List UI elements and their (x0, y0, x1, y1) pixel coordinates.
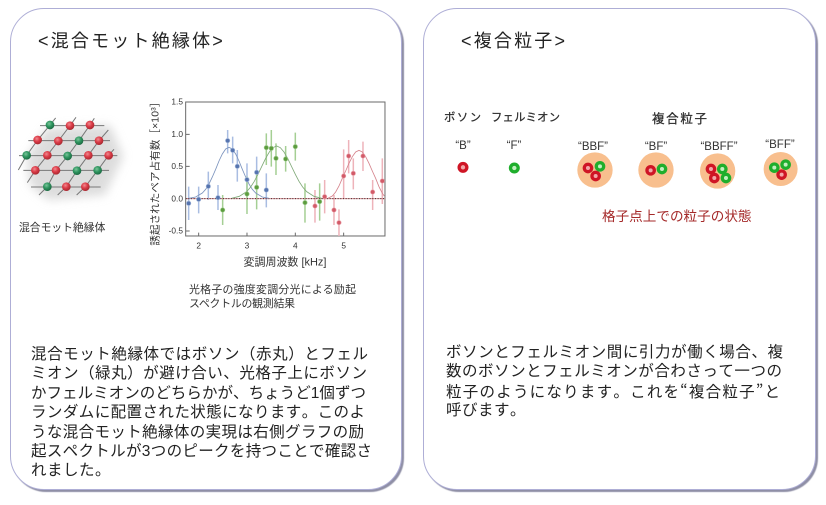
labels: particle names (455, 139, 795, 153)
label: mixed Mott insulator: 混合モット絶縁体 (19, 220, 106, 234)
headings: particle types: 複合粒子 (652, 111, 707, 126)
headings: particle types: フェルミオン (491, 111, 560, 124)
caption: spectrum observation: 光格子の強度変調分光による励起 (189, 282, 356, 296)
text block: mixed Mott insulator description: ランダムに配置された状態になります。このよ (31, 404, 365, 421)
labels: particle names: “BBFF” (700, 141, 738, 153)
text block: composite particle description: 呼びます。 (446, 402, 526, 419)
text block: composite particle description: 粒子のようになります。これを“複合粒子”と (446, 380, 780, 402)
y axis tick labels: -0.5 (169, 226, 183, 236)
error bars: green series (223, 130, 320, 225)
labels: particle names: “BBF” (578, 141, 608, 153)
text block: mixed Mott insulator description: かフェルミオンのどちらかが、ちょうど1個ずつ (31, 385, 366, 402)
text block: composite particle description: 数のボソンとフェルミオンが合わさって一つの (446, 363, 782, 380)
data points: green series (220, 144, 322, 212)
headings: particle types (444, 111, 707, 126)
x axis title: 変調周波数 [kHz] (243, 256, 326, 269)
text block: mixed Mott insulator description: れました。 (31, 462, 111, 479)
y axis tick labels: 1.5 (171, 97, 183, 107)
labels: particle names: “B” (455, 140, 471, 152)
y axis tick labels: 0.0 (171, 193, 183, 203)
data points: red series (313, 154, 384, 225)
text block: mixed Mott insulator description: 起スペクトルが3つのピークを持つことで確認さ (31, 443, 372, 460)
fit curve: blue (189, 147, 269, 198)
x axis tick labels: 2 (196, 240, 201, 250)
y axis tick labels (169, 97, 183, 236)
y axis title: 誘起されたペア占有数［×10³］ (149, 97, 162, 246)
zero line (186, 197, 385, 200)
text block: composite particle description (446, 344, 783, 419)
chart: excitation spectrum (149, 97, 385, 269)
labels: particle names: “F” (507, 140, 522, 152)
text block: mixed Mott insulator description: 混合モット絶縁体ではボソン（赤丸）とフェル (31, 346, 368, 363)
heading: composite particles: <複合粒子> (461, 31, 567, 51)
text block: composite particle description: ボソンとフェルミオン間に引力が働く場合、複 (446, 344, 783, 361)
labels: particle names: “BF” (645, 141, 667, 153)
data points: blue series (186, 138, 268, 205)
labels: particle names: “BFF” (765, 139, 795, 151)
caption: spectrum observation: スペクトルの観測結果 (189, 296, 295, 310)
headings: particle types: ボソン (444, 111, 481, 124)
error bars: red series (315, 140, 382, 236)
fit curve: green (232, 146, 322, 198)
x axis tick labels: 4 (293, 240, 298, 250)
icon: lattice of red and green atoms (18, 117, 123, 200)
plot frame and ticks (186, 102, 385, 236)
text block: mixed Mott insulator description: ミオン（緑丸）が避け合い、光格子上にボソン (31, 365, 367, 382)
x axis tick labels: 3 (245, 240, 250, 250)
y axis tick labels: 1.0 (171, 129, 183, 139)
error bars: blue series (189, 130, 266, 220)
caption: particle states on lattice sites: 格子点上での粒子の状態 (602, 209, 752, 224)
caption: spectrum observation (189, 282, 356, 310)
panel: mixed Mott insulator (10, 8, 402, 490)
y axis tick labels: 0.5 (171, 161, 183, 171)
icons: particles and composite particles (459, 152, 798, 189)
text block: mixed Mott insulator description: うな混合モット絶縁体の実現は右側グラフの励 (31, 424, 364, 441)
fit curve: red (328, 150, 384, 198)
panel: composite particles (423, 8, 816, 490)
heading: mixed Mott insulator: <混合モット絶縁体> (38, 31, 225, 51)
text block: mixed Mott insulator description (31, 346, 372, 479)
x axis tick labels: 5 (341, 240, 346, 250)
x axis tick labels (196, 240, 346, 250)
